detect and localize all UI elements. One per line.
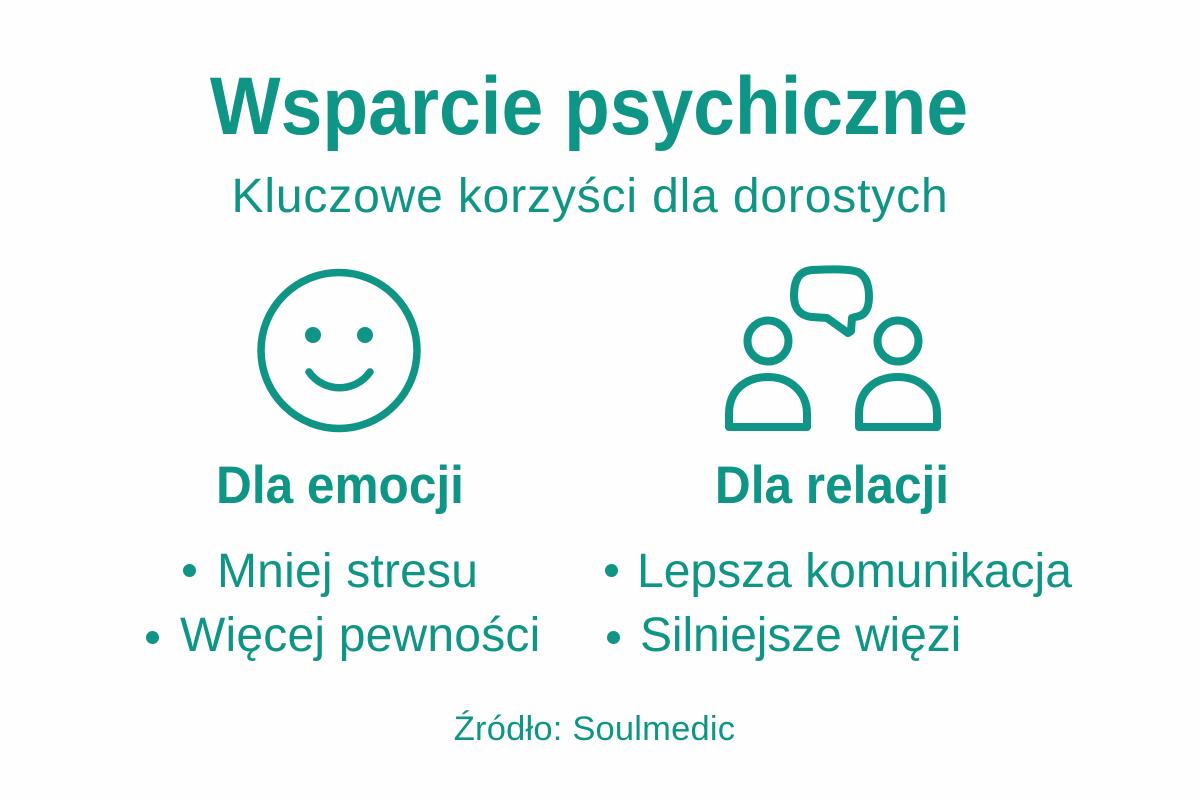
list item: Więcej pewności: Więcej pewności <box>180 609 540 662</box>
icon: two people with speech bubble <box>725 265 941 431</box>
icon: smiley face <box>257 268 421 432</box>
list item: Silniejsze więzi: Silniejsze więzi <box>640 609 961 662</box>
list item: Lepsza komunikacja: Lepsza komunikacja <box>637 545 1072 598</box>
title: Wsparcie psychiczne <box>210 61 968 152</box>
heading: Dla emocji: Dla emocji <box>216 456 464 515</box>
heading: Dla relacji: Dla relacji <box>715 456 949 515</box>
list item: Mniej stresu: Mniej stresu <box>217 545 478 598</box>
source: Źródło: Soulmedic <box>454 710 735 748</box>
subtitle: Kluczowe korzyści dla dorostych <box>232 170 948 223</box>
